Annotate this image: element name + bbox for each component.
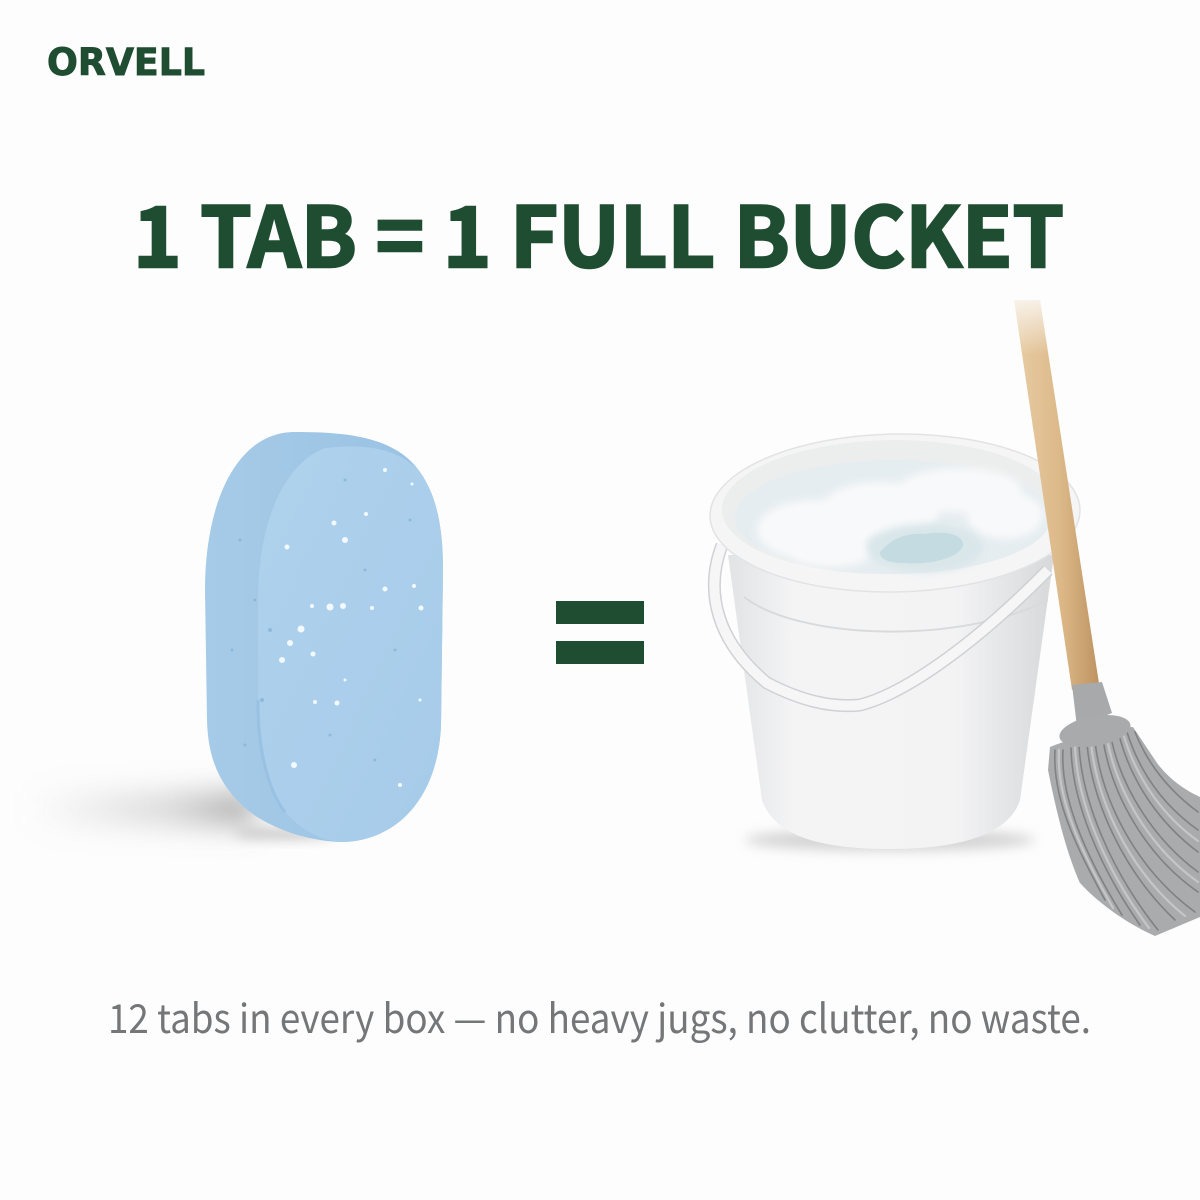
darker speckles [230, 478, 412, 762]
tablet contact shadow [235, 829, 335, 839]
white speckles [279, 468, 424, 787]
mop collar [1072, 682, 1112, 727]
foam ring around pool [867, 524, 983, 572]
mop handle [1014, 300, 1100, 690]
tablet edge [205, 432, 443, 842]
bucket ledge [744, 597, 1048, 632]
bucket inner wall [721, 437, 1059, 577]
icon: bucket with suds [709, 431, 1081, 851]
caption: 12 tabs in every box — no heavy jugs, no clutter, no waste. [108, 987, 1091, 1045]
pool [880, 533, 963, 563]
tablet face [258, 446, 443, 842]
tablet shadow [30, 792, 255, 826]
tablet bevel [258, 700, 285, 812]
bucket rim [709, 431, 1081, 595]
icon: blue cleaning tablet [30, 432, 443, 842]
strand detail [1055, 732, 1198, 930]
bucket body [728, 555, 1054, 849]
icon: mop [1005, 285, 1200, 936]
equals sign [556, 601, 644, 664]
foam [757, 468, 1043, 567]
bucket handle [714, 545, 1048, 706]
mop strands [1048, 727, 1200, 936]
mop collar disc [1057, 710, 1133, 752]
strand highlights [1059, 733, 1198, 928]
handle fade [1005, 285, 1050, 355]
brand logo: ORVELL [47, 41, 205, 84]
title: 1 TAB = 1 FULL BUCKET [133, 171, 1064, 291]
soapy water [735, 460, 1051, 574]
bucket shadow [745, 829, 1035, 851]
